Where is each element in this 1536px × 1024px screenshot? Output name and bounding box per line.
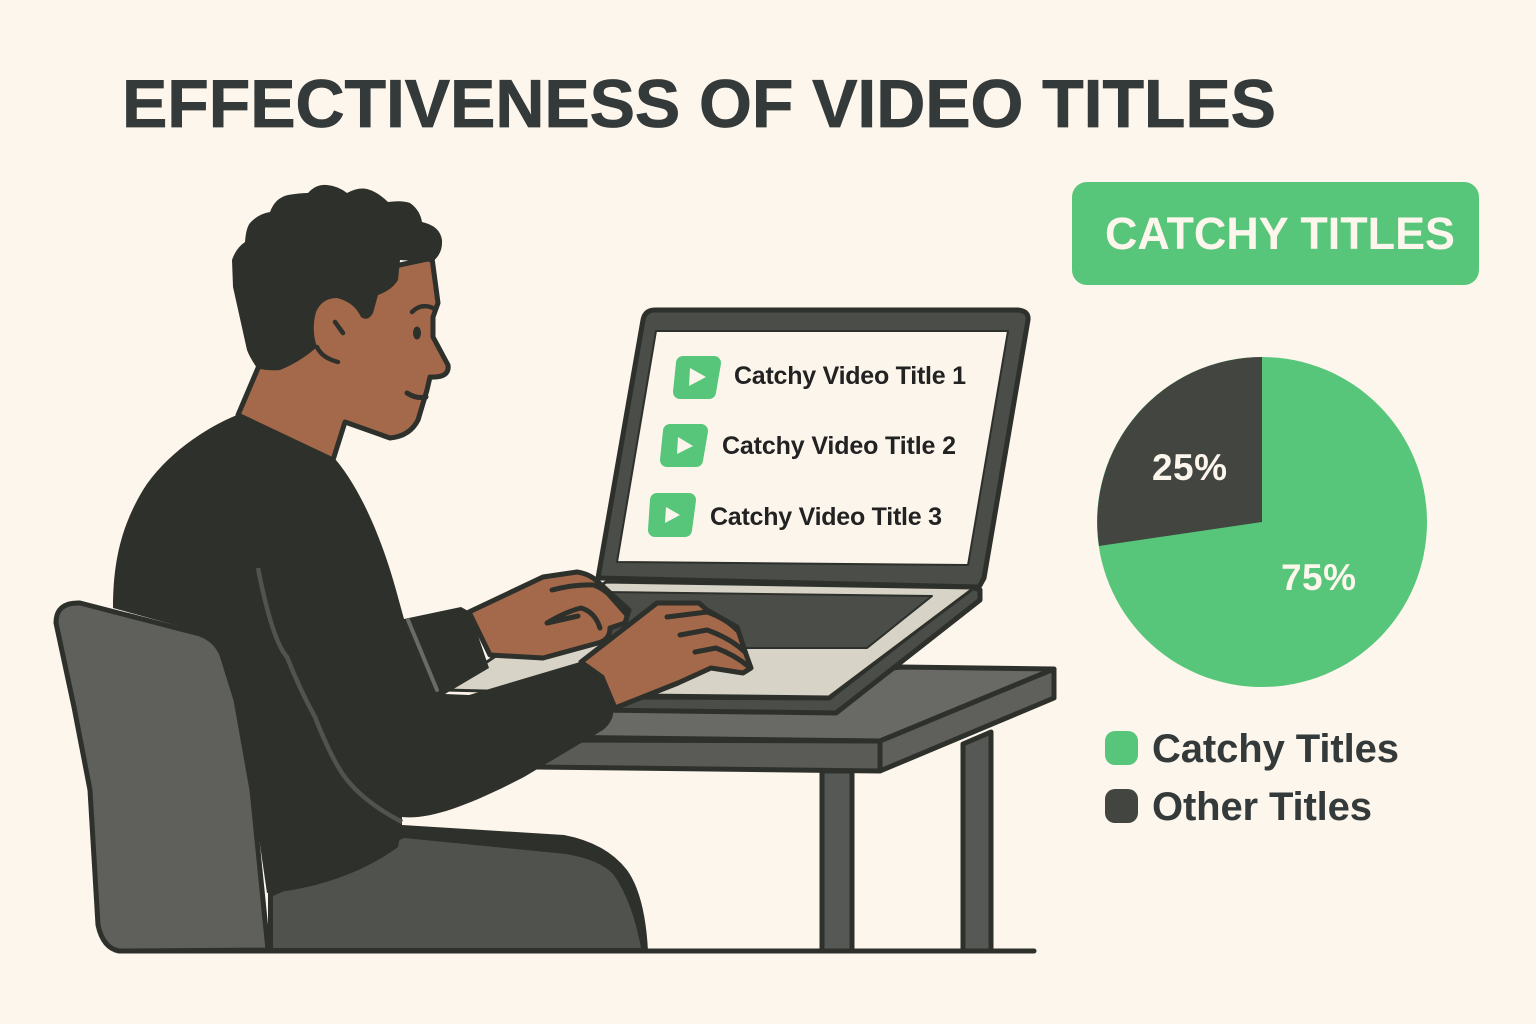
eye — [413, 326, 421, 340]
mouth — [407, 393, 426, 398]
torso and arms — [113, 415, 613, 893]
front hand fingers — [667, 612, 749, 667]
illustration: person at laptop — [56, 185, 1054, 951]
desk leg back — [963, 732, 991, 951]
pie chart — [1097, 357, 1427, 687]
laptop base — [445, 582, 974, 697]
badge: catchy titles: CATCHY TITLES — [1105, 208, 1455, 259]
title 3: Catchy Video Title 3 — [710, 503, 942, 531]
screen row 1 — [680, 362, 966, 392]
pie chart: 75% — [1281, 557, 1356, 598]
ear — [317, 322, 343, 362]
screen row 3 — [655, 500, 942, 531]
screen row 2 — [667, 431, 956, 460]
desk side edge — [880, 669, 1054, 771]
legend — [1105, 727, 1399, 829]
front hand — [581, 603, 751, 708]
desk leg front — [822, 771, 852, 951]
play icon 2 — [667, 431, 701, 460]
keyboard area — [600, 592, 932, 650]
back hand — [469, 572, 629, 658]
title: EFFECTIVENESS OF VIDEO TITLES — [122, 66, 1276, 142]
back hand fingers — [547, 585, 627, 628]
floor line — [119, 948, 1034, 954]
play icon 3 — [655, 500, 689, 530]
play icon 1 — [680, 363, 714, 392]
eyebrow — [412, 306, 435, 312]
desk — [535, 667, 1054, 951]
hair — [232, 185, 442, 370]
legs — [268, 825, 648, 951]
badge: catchy titles — [1072, 182, 1479, 285]
pie chart: 25% — [1152, 447, 1227, 488]
sleeve seam — [408, 620, 437, 690]
face — [238, 258, 448, 460]
laptop side edge — [600, 587, 980, 713]
laptop screen — [598, 310, 1028, 587]
legend: Other Titles — [1152, 785, 1372, 829]
screen display — [617, 331, 1008, 565]
legend: Catchy Titles — [1152, 727, 1399, 771]
sweater body seam — [258, 568, 402, 822]
title 2: Catchy Video Title 2 — [722, 432, 956, 460]
chair — [56, 603, 268, 951]
desk top — [540, 667, 1054, 741]
desk front edge — [535, 740, 880, 771]
title 1: Catchy Video Title 1 — [734, 362, 966, 390]
laptop — [445, 310, 1028, 713]
head and neck — [232, 185, 448, 460]
